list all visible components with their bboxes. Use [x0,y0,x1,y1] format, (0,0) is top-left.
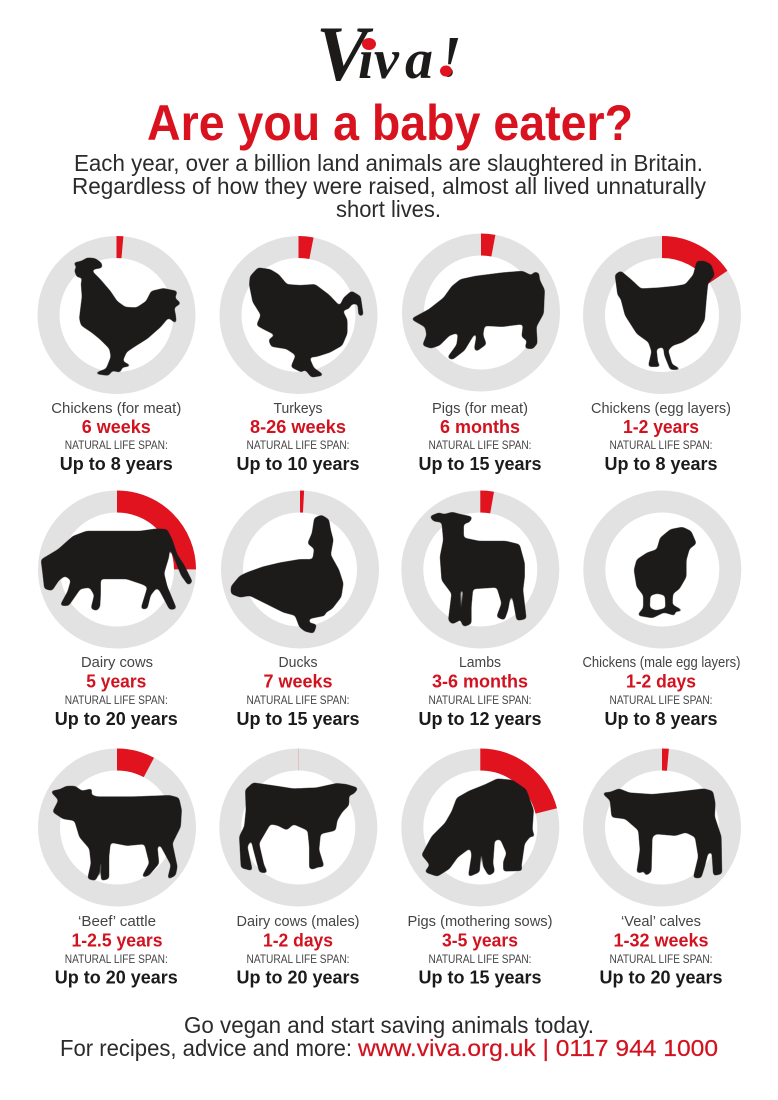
panel: dairy cows: 5 years [86,672,146,692]
panel: turkeys [230,247,366,474]
panel: veal calves: Up to 20 years [600,968,722,988]
panel: pigs for meat: 6 months [440,417,520,437]
panel: turkeys: NATURAL LIFE SPAN: [246,440,350,452]
footer call to action: For recipes, advice and more: [60,1035,352,1061]
icon: pig [412,272,544,359]
panel: mothering sows: 3-5 years [442,930,518,950]
icon: sow [422,779,534,876]
panel: turkeys: Up to 10 years [236,454,360,474]
icon: rooster [74,258,180,375]
panel: chickens for meat: 6 weeks [82,417,151,437]
intro text [72,150,706,222]
icon: veal calf [603,789,721,877]
panel: chickens for meat: Chickens (for meat) [51,401,181,417]
panel: lambs: NATURAL LIFE SPAN: [428,695,532,707]
panel: dairy cows: Dairy cows [81,655,153,671]
panel: male chicks: NATURAL LIFE SPAN: [610,695,712,707]
icon: lamb [431,513,526,626]
icon: duck [232,516,343,633]
panel: pigs for meat [412,244,549,474]
panel: turkeys: Turkeys [274,401,322,417]
icon: dairy cow [42,529,192,610]
panel: veal calves: ‘Veal’ calves [621,914,701,930]
panel: male chicks [582,502,740,729]
panel: beef cattle: ‘Beef’ cattle [78,914,156,930]
panel: beef cattle: NATURAL LIFE SPAN: [65,954,168,966]
intro text: short lives. [336,196,441,222]
panel: male dairy calves: Dairy cows (males) [236,914,360,930]
panel: dairy cows: Up to 20 years [55,709,178,729]
intro text: Regardless of how they were raised, almost all lived unnaturally [72,173,706,199]
panel: chickens egg layers: Chickens (egg layers) [591,401,731,417]
panel: male chicks: Up to 8 years [604,709,718,729]
panel: veal calves: NATURAL LIFE SPAN: [610,954,712,966]
panel: chickens for meat: Up to 8 years [60,454,173,474]
panel: ducks [232,502,368,729]
panel: lambs: Up to 12 years [418,709,542,729]
icon: turkey [250,268,363,377]
panel: lambs [412,502,548,729]
panel: ducks: Up to 15 years [236,709,360,729]
footer call to action [60,1012,718,1061]
icon: male calf [240,783,357,872]
panel: male dairy calves: Up to 20 years [236,968,360,988]
panel: beef cattle [49,760,185,988]
panel: ducks: 7 weeks [264,672,332,692]
panel: male dairy calves [230,760,366,988]
panel: male dairy calves: 1-2 days [263,930,333,950]
panel: lambs: 3-6 months [432,672,528,692]
panel: mothering sows: NATURAL LIFE SPAN: [428,954,532,966]
intro text: Each year, over a billion land animals are slaughtered in Britain. [74,150,703,176]
panel: lambs: Lambs [459,655,501,671]
panel: beef cattle: Up to 20 years [55,968,178,988]
panel: dairy cows: NATURAL LIFE SPAN: [65,695,168,707]
panel: pigs for meat: Up to 15 years [418,454,542,474]
panel: male chicks: Chickens (male egg layers) [582,655,740,671]
panel: turkeys: 8-26 weeks [250,417,346,437]
panel: beef cattle: 1-2.5 years [72,930,162,950]
panel: chickens egg layers: NATURAL LIFE SPAN: [610,440,712,452]
logo: Viva!: V [316,10,374,97]
panel: mothering sows: Up to 15 years [418,968,542,988]
title: Are you a baby eater? [147,95,633,151]
panel: mothering sows: Pigs (mothering sows) [408,914,552,930]
panel: chickens for meat: NATURAL LIFE SPAN: [65,440,168,452]
panel: chickens egg layers [591,247,731,474]
panel: male chicks: 1-2 days [626,672,696,692]
panel: pigs for meat: Pigs (for meat) [432,401,528,417]
footer call to action: Go vegan and start saving animals today. [184,1012,594,1038]
panel: ducks: Ducks [278,655,318,671]
panel: chickens for meat [48,247,184,474]
logo: Viva! [316,10,462,97]
icon: beef cow [52,787,181,880]
panel: chickens egg layers: 1-2 years [623,417,699,437]
logo: Viva!: iva [358,29,433,91]
panel: dairy cows [42,502,192,729]
panel: male dairy calves: NATURAL LIFE SPAN: [246,954,350,966]
panel: chickens egg layers: Up to 8 years [604,454,718,474]
footer call to action: www.viva.org.uk | 0117 944 1000 [357,1035,718,1061]
panel: veal calves [594,760,730,988]
panel: ducks: NATURAL LIFE SPAN: [246,695,350,707]
panel: pigs for meat: NATURAL LIFE SPAN: [428,440,532,452]
icon: hen [616,262,714,369]
icon: chick [635,528,696,617]
panel: mothering sows [408,760,552,988]
panel: veal calves: 1-32 weeks [614,930,708,950]
logo: Viva!: ! [439,24,462,89]
